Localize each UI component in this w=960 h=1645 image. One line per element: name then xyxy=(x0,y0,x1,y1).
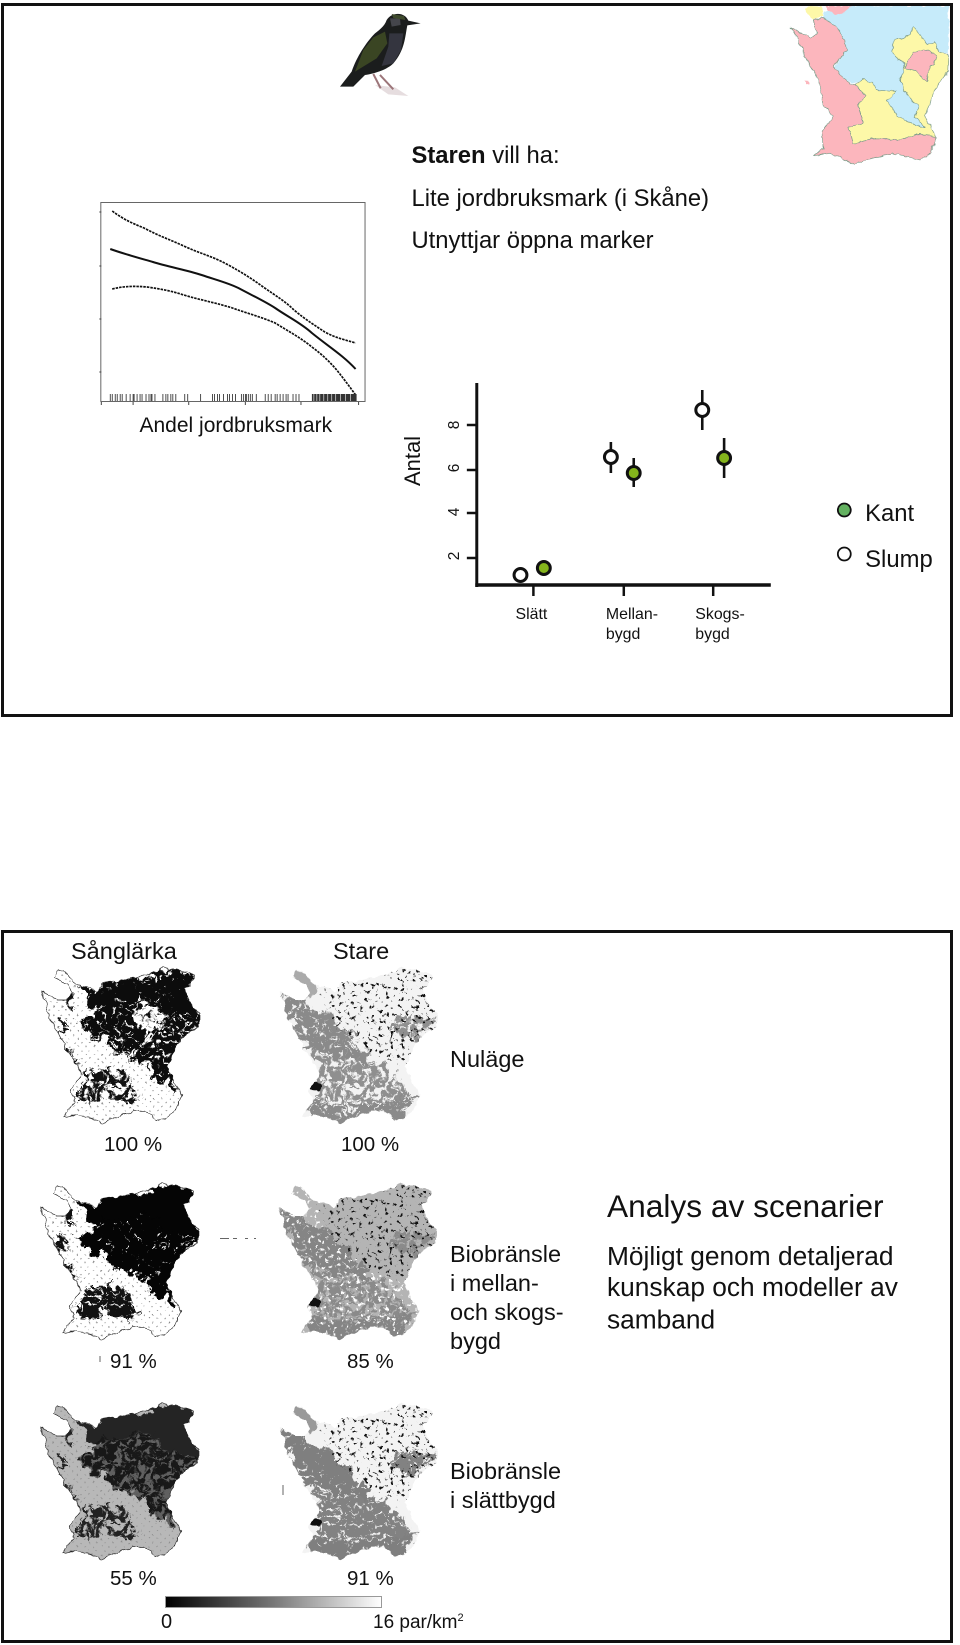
x axis labels: bygd xyxy=(695,626,730,643)
text block: scenario explanation: kunskap och modeller av xyxy=(607,1272,899,1302)
map: starling current xyxy=(278,967,440,1127)
value: starling current: 100 % xyxy=(341,1133,399,1156)
map: skylark biofuel in plains xyxy=(40,1403,199,1559)
data points: Slump xyxy=(514,404,709,582)
scan specks xyxy=(100,1238,283,1495)
panel: scenario frame xyxy=(2,932,952,1642)
map: starling biofuel in mixed and forest land xyxy=(277,1183,439,1343)
text block: scenario explanation xyxy=(607,1241,899,1334)
legend xyxy=(838,500,933,573)
heading: what the starling wants: Staren vill ha: xyxy=(412,142,560,169)
x axis labels: Slätt xyxy=(516,606,548,623)
panel: starling frame xyxy=(2,4,952,716)
x axis labels xyxy=(516,606,745,643)
map: Skåne regions xyxy=(790,6,949,164)
text block: scenario explanation: Möjligt genom detaljerad xyxy=(607,1241,894,1271)
text: uses open land: Utnyttjar öppna marker xyxy=(412,227,654,254)
y axis title: Antal xyxy=(400,436,425,486)
color scale xyxy=(161,1596,464,1633)
row label: biofuel in mixed and forest land: bygd xyxy=(450,1328,501,1354)
x axis labels: Mellan- xyxy=(606,606,658,623)
y axis numbers: 4 xyxy=(446,507,463,516)
chart: response curve to farmland share xyxy=(99,202,365,405)
legend: Slump xyxy=(865,546,933,573)
x axis labels: bygd xyxy=(606,626,640,643)
color scale: 16 par/km xyxy=(373,1612,457,1633)
row label: biofuel in mixed and forest land: Biobränsle xyxy=(450,1241,561,1267)
row label: biofuel in mixed and forest land: i mellan- xyxy=(450,1270,539,1296)
row label: biofuel in plains xyxy=(450,1458,561,1513)
legend: Kant xyxy=(865,500,915,527)
value: starling biofuel plains: 91 % xyxy=(347,1567,394,1590)
x axis labels: Skogs- xyxy=(695,606,745,623)
text: little farmland: Lite jordbruksmark (i Skåne) xyxy=(412,185,709,212)
heading: what the starling wants xyxy=(412,142,709,254)
row label: current: Nuläge xyxy=(450,1046,524,1072)
y axis numbers: 2 xyxy=(446,552,463,560)
value: starling biofuel mixed: 85 % xyxy=(347,1350,394,1373)
column heading: skylark: Sånglärka xyxy=(71,938,178,964)
y axis numbers: 6 xyxy=(446,464,463,472)
value: skylark biofuel mixed: 91 % xyxy=(110,1350,157,1373)
value: skylark biofuel plains: 55 % xyxy=(110,1567,157,1590)
y axis numbers: 8 xyxy=(446,421,463,429)
map: skylark biofuel in mixed and forest land xyxy=(40,1183,199,1339)
row label: biofuel in plains: i slättbygd xyxy=(450,1487,556,1513)
chart: counts by landscape type xyxy=(400,383,933,643)
map: skylark current xyxy=(41,967,200,1123)
y axis numbers xyxy=(446,421,463,560)
axis label: farmland share: Andel jordbruksmark xyxy=(140,414,333,437)
heading: scenario analysis: Analys av scenarier xyxy=(607,1188,884,1224)
row label: biofuel in mixed and forest land: och skogs- xyxy=(450,1299,564,1325)
color scale: 2 xyxy=(457,1612,464,1624)
icon: starling bird xyxy=(340,14,421,96)
text block: scenario explanation: samband xyxy=(607,1304,715,1334)
data points: Kant xyxy=(537,452,731,574)
row label: biofuel in plains: Biobränsle xyxy=(450,1458,561,1484)
map: starling biofuel in plains xyxy=(278,1403,440,1563)
row label: biofuel in mixed and forest land xyxy=(450,1241,564,1354)
color scale: 0 xyxy=(161,1611,172,1633)
column heading: starling: Stare xyxy=(333,938,389,964)
error bars xyxy=(611,390,724,487)
value: skylark current: 100 % xyxy=(104,1133,162,1156)
